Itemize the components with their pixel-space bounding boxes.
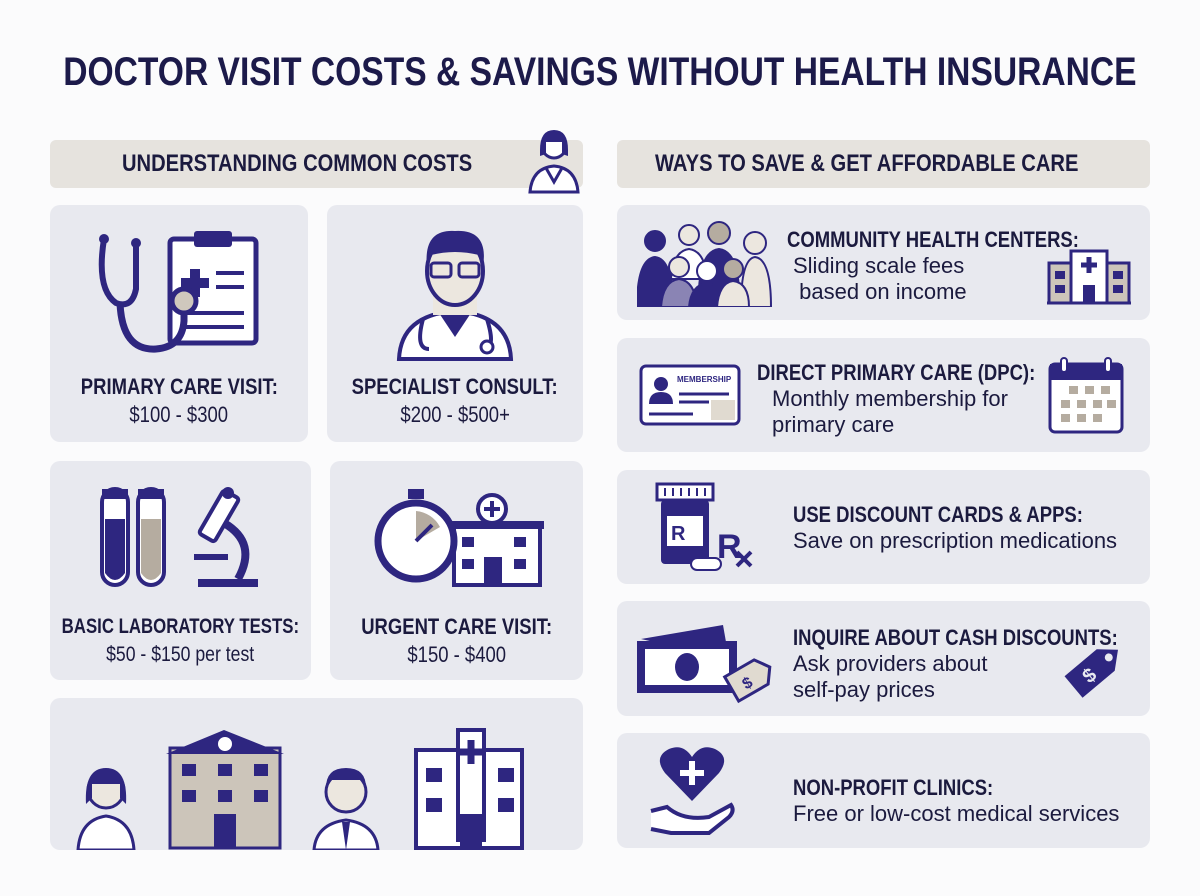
label: urgent care: $150 - $400 — [407, 642, 506, 667]
icon: membership card — [640, 364, 740, 426]
text: community: based on income — [799, 279, 967, 304]
text: community — [787, 227, 1079, 304]
icon: calendar — [1048, 357, 1124, 434]
panel: direct primary care — [617, 338, 1150, 452]
text: cash discounts: self-pay prices — [793, 677, 935, 702]
panel: laboratory tests — [50, 461, 311, 680]
text: discount cards: USE DISCOUNT CARDS & APPS: — [793, 502, 1083, 527]
icon: hospital — [1047, 250, 1131, 304]
icon: cash with tag: $ — [740, 674, 756, 693]
text: non-profit — [793, 775, 1119, 826]
icon: price tag: $ — [1078, 664, 1101, 688]
label: primary care — [80, 374, 278, 427]
icon: doctor header — [528, 130, 580, 194]
text: cash discounts: Ask providers about — [793, 651, 987, 676]
icon: price tag — [1064, 649, 1118, 698]
panel: community health centers — [617, 205, 1150, 320]
icon: prescription bottle: R — [717, 528, 742, 566]
text: community: COMMUNITY HEALTH CENTERS: — [787, 227, 1079, 252]
text: community: Sliding scale fees — [793, 253, 964, 278]
header: understanding common costs — [50, 140, 583, 188]
header: ways to save — [617, 140, 1150, 188]
label: lab tests — [62, 615, 299, 666]
icon: cash with tag — [637, 625, 772, 704]
text: DPC — [757, 360, 1035, 437]
label: specialist: SPECIALIST CONSULT: — [352, 374, 558, 399]
panel: urgent care — [330, 461, 583, 680]
label: specialist — [352, 374, 558, 427]
label: lab tests: $50 - $150 per test — [106, 643, 255, 666]
icon: people and buildings — [76, 728, 524, 850]
text: DPC: Monthly membership for — [772, 386, 1008, 411]
icon: stopwatch and clinic — [374, 489, 544, 587]
header: ways to save: WAYS TO SAVE & GET AFFORDABLE CARE — [655, 150, 1078, 177]
icon: heart in hand — [650, 747, 735, 835]
text: non-profit: NON-PROFIT CLINICS: — [793, 775, 993, 800]
header: understanding common costs: UNDERSTANDING COMMON COSTS — [122, 150, 472, 177]
panel: specialist consult — [327, 205, 583, 442]
icon: prescription bottle — [656, 482, 752, 571]
text: cash discounts — [793, 625, 1118, 702]
icon: group of people — [637, 221, 772, 307]
panel: cash discounts — [617, 601, 1150, 716]
panel: discount cards — [617, 470, 1150, 584]
text: cash discounts: INQUIRE ABOUT CASH DISCOUNTS: — [793, 625, 1118, 650]
icon: specialist doctor — [396, 230, 514, 361]
icon: test tubes and microscope — [100, 487, 258, 587]
icon: prescription bottle: R — [671, 523, 686, 545]
label: specialist: $200 - $500+ — [400, 402, 510, 427]
label: primary care: $100 - $300 — [130, 402, 228, 427]
title: DOCTOR VISIT COSTS & SAVINGS WITHOUT HEALTH INSURANCE — [63, 50, 1137, 94]
icon: membership card: MEMBERSHIP — [677, 375, 732, 384]
text: discount cards: Save on prescription medications — [793, 528, 1117, 553]
icon: stethoscope and clipboard — [98, 231, 258, 353]
label: primary care: PRIMARY CARE VISIT: — [80, 374, 278, 399]
label: lab tests: BASIC LABORATORY TESTS: — [62, 615, 299, 638]
text: DPC: DIRECT PRIMARY CARE (DPC): — [757, 360, 1035, 385]
panel: non-profit clinics — [617, 733, 1150, 848]
label: urgent care: URGENT CARE VISIT: — [361, 614, 552, 639]
text: DPC: primary care — [772, 412, 894, 437]
panel: bottom illustration — [50, 698, 583, 850]
text: discount cards — [793, 502, 1117, 553]
label: urgent care — [361, 614, 552, 667]
text: non-profit: Free or low-cost medical services — [793, 801, 1119, 826]
panel: primary care visit — [50, 205, 308, 442]
